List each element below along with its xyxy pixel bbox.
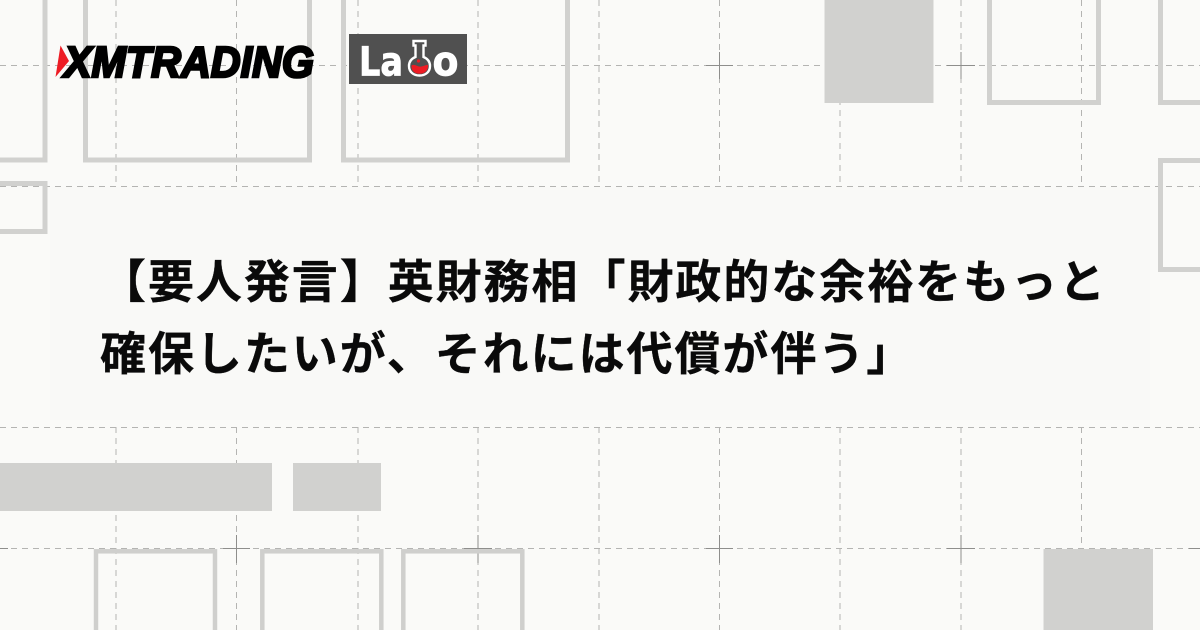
- title: [100, 256, 1107, 380]
- title: 【要人発言】英財務相「財政的な余裕をもっと: [100, 256, 1107, 308]
- gray block: bottom right: [1044, 549, 1153, 630]
- gray bar: lower left long: [0, 463, 272, 511]
- outline squares: bottom row: [96, 551, 522, 630]
- wordmark: XMTRADING: [61, 38, 314, 87]
- gray bar: lower left short: [293, 463, 381, 511]
- logo text: La: La: [359, 40, 403, 86]
- icon: red arrow: [56, 46, 69, 77]
- logo text: o: o: [432, 38, 458, 86]
- gray block: top right: [824, 0, 934, 103]
- outline squares: top row: [0, 0, 1200, 270]
- title: 確保したいが、それには代償が伴う」: [100, 328, 914, 380]
- logo: XMTRADING: [56, 38, 314, 87]
- logo: Labo: [349, 34, 467, 86]
- icon: flask: [409, 41, 430, 76]
- center panel: [50, 187, 1150, 420]
